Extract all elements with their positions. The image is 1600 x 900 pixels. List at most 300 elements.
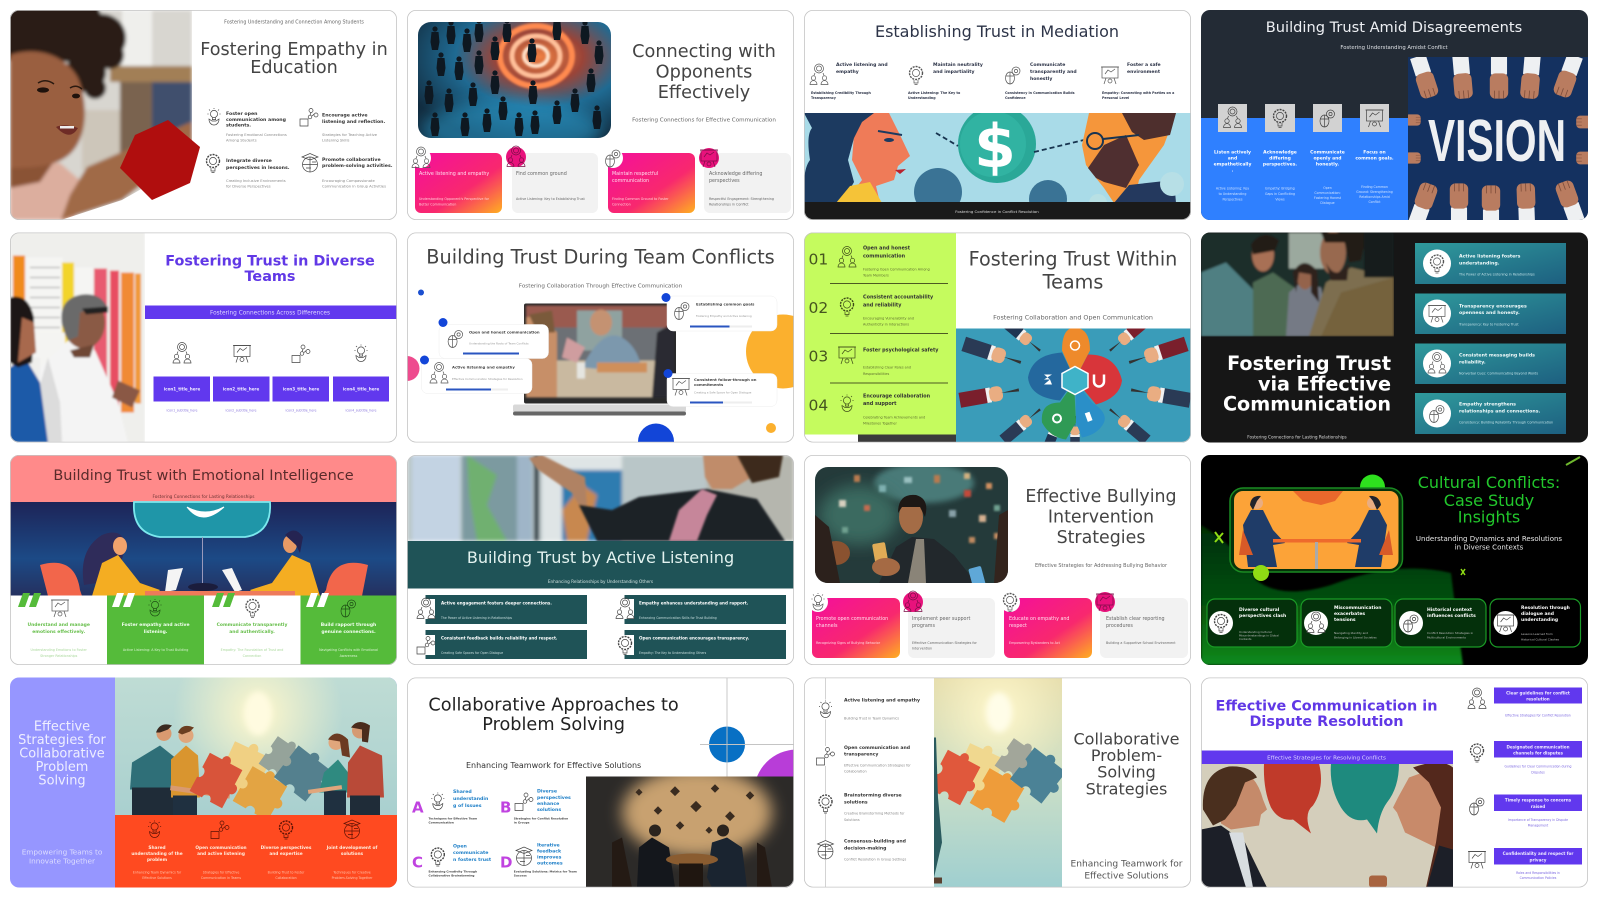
item B: solutions [537, 807, 561, 813]
card: promote open communication channels: channels [816, 623, 838, 629]
card: miscommunication: exacerbates [1334, 611, 1365, 617]
column: diverse perspectives: Diverse perspectives [261, 846, 311, 851]
item A: Shared [453, 790, 472, 795]
panel: Cultural Conflicts Case Study Insights [1201, 455, 1588, 665]
photo: man with phone among floating apps [815, 463, 1008, 590]
item: active listening and empathy: Active listening and empathy [844, 698, 920, 704]
item 04 [808, 394, 931, 426]
photo: crowd around glowing target [418, 22, 611, 138]
item: confidentiality: Communication Policies [1520, 876, 1557, 880]
card: consistent follow-through [664, 369, 777, 406]
item: open communication and transparency: Open communication and [844, 746, 910, 751]
subtitle: Innovate Together [29, 856, 95, 866]
laptop with meeting photo [513, 304, 686, 416]
column: diverse perspectives: Building Trust to Foster [268, 870, 304, 874]
card: educate on empathy and respect: Empowering Bystanders to Act [1009, 641, 1061, 645]
card: resolution through dialogue: understanding [1521, 617, 1558, 623]
card: establish clear reporting procedures: procedures [1106, 623, 1133, 629]
card: open and honest communication: Understanding the Roots of Team Conflicts [469, 342, 529, 346]
title: Fostering Empathy in [200, 40, 388, 60]
column: build rapport: Navigating Conflicts with Emotional [319, 648, 378, 652]
column: understand and manage emotions [10, 593, 107, 665]
card: diverse cultural perspectives: Diverse cultural [1239, 608, 1279, 613]
title: Education [250, 58, 338, 78]
column: acknowledge differing perspectives: Views [1275, 198, 1285, 202]
card: active listening and empathy [411, 147, 502, 213]
subtitle: Understanding Dynamics and Resolutions [1416, 535, 1562, 543]
blue panel [1201, 118, 1408, 220]
item D: improves [537, 854, 562, 860]
panel: Fostering Trust Within Teams [804, 232, 1192, 454]
item: communicate transparently: Confidence [1005, 96, 1026, 100]
subtitle: Effective Strategies for Addressing Bullying Behavior [1035, 563, 1168, 569]
subtitle: Fostering Connections for Lasting Relationships [152, 494, 255, 500]
item: communicate transparently: transparently and [1030, 69, 1077, 75]
item C [412, 844, 492, 878]
item: foster a safe environment: Personal Level [1102, 96, 1129, 100]
item: clear guidelines: Effective Strategies for Conflict Resolution [1505, 714, 1571, 718]
card: miscommunication [1301, 599, 1392, 647]
card: historical context: Conflict Resolution Strategies in [1427, 631, 1473, 635]
column: listen actively: . [1232, 168, 1234, 174]
column: communicate transparently: and authentically. [229, 629, 275, 635]
card: resolution through dialogue: Resolution through [1521, 606, 1570, 611]
bottom dark strip [858, 434, 956, 442]
subtitle: Effective Solutions [1084, 872, 1169, 882]
item: consistent messaging: Nonverbal Cues: Communicating Beyond Words [1459, 372, 1538, 376]
column: understand and manage emotions: Stronger Relationships [40, 654, 78, 658]
column: listen actively: to Understanding [1219, 192, 1246, 196]
item B: perspectives [537, 795, 571, 801]
item: clear guidelines [1468, 688, 1582, 718]
title: Effective Communication in [1216, 698, 1437, 714]
title: Effective Bullying [1025, 487, 1177, 507]
card: historical context: Multicultural Environments [1427, 636, 1466, 640]
card: implement peer support programs: Effective Communication Strategies for [912, 641, 977, 645]
item: brainstorming diverse solutions: Creative Brainstorming Methods for [844, 812, 905, 816]
item: promote collaborative activities [302, 154, 393, 188]
panel: Building Trust During Team Conflicts [394, 232, 820, 460]
column: icon3 [272, 345, 329, 412]
item 03: Establishing Clear Roles and [863, 366, 911, 370]
column: listen actively: Active Listening: Key [1216, 186, 1249, 190]
column: icon1: icon1_subtitle_here [167, 408, 198, 412]
column: acknowledge differing perspectives: perspectives. [1263, 162, 1297, 168]
column: diverse perspectives: Collaboration [275, 876, 297, 880]
item: brainstorming diverse solutions [816, 792, 905, 822]
column: open communication: and active listening [197, 851, 245, 857]
card: consistent follow-through: Creating a Safe Space for Open Dialogue [694, 390, 752, 394]
item: consistent feedback: Creating Safe Spaces for Open Dialogue [441, 651, 503, 655]
title: Building Trust with Emotional Intelligence [53, 468, 354, 484]
panel: Building Trust by Active Listening [407, 455, 794, 665]
banner: Fostering Connections Across Differences [210, 310, 330, 316]
item C: Collaborative Brainstorming [428, 874, 474, 878]
title: Collaborative [19, 746, 105, 762]
card: implement peer support programs: programs [912, 623, 935, 629]
item D: Success [514, 874, 527, 878]
item: timely response: Importance of Transparency in Dispute [1508, 818, 1568, 822]
item: transparency: openness and honesty. [1459, 310, 1520, 316]
illustration: people joining puzzle pieces [115, 628, 397, 823]
column: joint development [326, 820, 377, 880]
card: establishing common goals: Fostering Empathy and Active Listening [696, 314, 752, 318]
item B: Diverse [537, 790, 557, 794]
card: consistent follow-through: Consistent follow-through on [694, 377, 756, 382]
column: focus on common goals: Focus on [1363, 150, 1386, 156]
column: joint development: solutions [341, 851, 364, 857]
title: Intervention [1048, 508, 1154, 528]
item: consensus-building [816, 838, 906, 862]
item D [500, 842, 577, 878]
item: consensus-building: Conflict Resolution in Group Settings [844, 858, 906, 862]
card: active listening and empathy: Active listening and empathy [452, 364, 515, 370]
column: joint development: Techniques for Creative [333, 870, 371, 874]
subtitle: Fostering Collaboration Through Effective Communication [519, 284, 683, 290]
item: consensus-building: decision-making [844, 846, 886, 852]
item: integrate diverse perspectives: Integrate diverse [226, 159, 272, 164]
column: shared understanding: Enhancing Team Dynamics for [133, 870, 181, 874]
item: open communication and transparency: Collaboration [844, 770, 867, 774]
item: communicate transparently [1005, 62, 1077, 100]
item: maintain neutrality: Active Listening: The Key to [908, 91, 960, 95]
item: clear guidelines: Clear guidelines for conflict [1506, 690, 1570, 696]
column: build rapport: genuine connections. [321, 629, 376, 635]
salmon header [10, 455, 397, 502]
item 02 [808, 294, 934, 326]
item 03: Responsibilities [863, 372, 889, 376]
item: active listening: The Power of Active Listening in Relationships [1458, 272, 1535, 276]
title: Opponents [656, 62, 752, 82]
column: listen actively: Listen actively [1214, 150, 1251, 156]
banner: Effective Strategies for Resolving Conflicts [1267, 756, 1386, 762]
item D: Iterative [537, 844, 560, 848]
title: Building Trust During Team Conflicts [426, 246, 775, 268]
column: understand and manage emotions: Understanding Emotions to Foster [31, 648, 87, 652]
item: encourage active listening: Listening Skills [322, 138, 349, 142]
title: Problem [36, 760, 88, 775]
card: resolution through dialogue: dialogue and [1521, 611, 1554, 617]
card: open and honest communication [438, 318, 548, 358]
item C: communicate [453, 850, 488, 856]
card: maintain respectful communication: Finding Common Ground to Foster [612, 197, 669, 201]
item C: Open [453, 844, 467, 850]
item B: Strategies for Conflict Resolution [514, 816, 568, 820]
item: active listening: understanding. [1459, 260, 1500, 266]
item C: n fosters trust [453, 857, 492, 863]
card: historical context: Historical context [1427, 608, 1472, 613]
item: timely response: raised [1531, 804, 1545, 809]
column: icon2: icon2_subtitle_here [226, 408, 257, 412]
item: designated channels: Guidelines for Clear Communication during [1505, 764, 1571, 768]
panel: Fostering Trust via Effective Communication [1201, 230, 1588, 442]
column: foster empathy: Foster empathy and active [122, 623, 190, 628]
column: shared understanding: understanding of the [131, 851, 183, 857]
item: transparency: Transparency: Key to Fostering Trust [1458, 322, 1519, 326]
card: active listening and empathy: Effective Communication Strategies for Resolution [452, 377, 523, 381]
title: Effective [34, 720, 90, 734]
card: promote open communication channels: Recognizing Signs of Bullying Behavior [816, 641, 881, 645]
panel: Building Trust with Emotional Intelligence [10, 455, 397, 665]
panel: Effective Bullying Intervention Strategies [804, 455, 1191, 665]
item A: A [412, 798, 424, 816]
item: active listening: Active listening fosters [1459, 254, 1520, 260]
card: miscommunication: Miscommunication [1334, 606, 1381, 611]
item: brainstorming diverse solutions: Brainstorming diverse [844, 794, 902, 798]
card: active listening and empathy: Understanding Opponent's Perspective for [419, 197, 489, 201]
item B: in Groups [514, 820, 530, 824]
item: confidentiality: privacy [1530, 858, 1547, 862]
card: establish clear reporting procedures: Establish clear reporting [1106, 617, 1165, 622]
card: consistent follow-through: commitments [694, 382, 724, 387]
item: foster a safe environment: environment [1127, 69, 1161, 75]
card: implement peer support programs: Implement peer support [912, 617, 970, 622]
item 04: Milestones Together [863, 422, 898, 426]
card: find common ground: Find common ground [516, 171, 567, 177]
card: maintain respectful communication: Maintain respectful [612, 172, 658, 177]
card: diverse cultural perspectives: Contexts [1239, 637, 1252, 641]
column: build rapport: Build rapport through [321, 623, 376, 628]
illustration: negotiators at table [1230, 474, 1402, 581]
item 04: Celebrating Team Achievements and [863, 416, 925, 420]
item 03 [808, 347, 939, 376]
photo: child in classroom [0, 0, 192, 220]
subtitle: Fostering Understanding and Connection Among Students [224, 20, 364, 26]
column: communicate openly: Fostering Honest [1314, 196, 1342, 200]
column: icon3: icon3_subtitle_here [286, 408, 317, 412]
panel: Establishing Trust in Mediation [804, 10, 1191, 220]
column: focus on common goals: Conflict [1368, 200, 1381, 204]
item: promote collaborative activities: problem-solving activities. [322, 163, 393, 169]
card: establish clear reporting procedures: Building a Supportive School Environment [1106, 641, 1176, 645]
column: acknowledge differing perspectives: differing [1269, 156, 1291, 162]
sparkle marks [1215, 457, 1580, 575]
title: Building Trust Amid Disagreements [1266, 19, 1522, 36]
photo: team at table under floating pieces [586, 768, 794, 888]
column: open communication: Strategies for Effective [203, 870, 239, 874]
banner [1201, 750, 1453, 764]
card: diverse cultural perspectives: Understanding Cultural [1239, 630, 1272, 634]
column: focus on common goals: Relationships Amid [1359, 195, 1390, 199]
column: communicate openly: Open [1323, 186, 1332, 190]
illustration: two people and coin: $ [974, 112, 1016, 182]
card: establishing common goals [662, 293, 777, 331]
item: foster open communication: Foster open [226, 112, 257, 117]
item: promote collaborative activities: Encouraging Compassionate [322, 179, 375, 183]
item: communicate transparently: honestly [1030, 76, 1052, 82]
title: Effectively [658, 83, 750, 103]
column: acknowledge differing perspectives: Gaps in Conflicting [1265, 192, 1295, 196]
item 01: Open and honest [863, 246, 910, 252]
item A: Communication [428, 820, 454, 824]
column: joint development: Problem-Solving Together [332, 876, 373, 880]
column: diverse perspectives [261, 821, 312, 880]
item: confidentiality: Roles and Responsibilities in [1516, 871, 1560, 875]
panel: Collaborative Problem-Solving Strategies [804, 642, 1191, 888]
item: consistent feedback [416, 630, 587, 659]
item D: feedback [537, 848, 562, 854]
item: open communication: Empathy: The Key to Understanding Others [639, 651, 707, 655]
illustration: hands assembling petals [956, 315, 1192, 454]
subtitle: Empowering Teams to [22, 848, 102, 856]
item: encourage active listening [300, 108, 386, 142]
card: acknowledge differing perspectives [699, 148, 791, 213]
item: encourage active listening: listening and reflection. [322, 119, 386, 125]
item: maintain neutrality [908, 62, 983, 100]
column: listen actively: Perspectives [1222, 198, 1243, 202]
card: acknowledge differing perspectives: Acknowledge differing [709, 172, 762, 177]
item 02: Authenticity in Interactions [863, 322, 909, 326]
item: active listening and empathy: Building Trust in Team Dynamics [844, 716, 899, 720]
title: Dispute Resolution [1249, 714, 1404, 730]
item: designated channels: channels for disputes [1513, 750, 1563, 756]
column: shared understanding: Shared [148, 846, 166, 851]
item 01: Team Members [862, 274, 889, 278]
item: empathy enhances [615, 595, 786, 624]
item: foster open communication: communication among [226, 117, 286, 123]
item: foster open communication: Fostering Emotional Connections [226, 133, 287, 137]
item: open communication and transparency: transparency [844, 752, 878, 758]
card: miscommunication: Navigating Identity and [1334, 631, 1368, 635]
item: communicate transparently: Consistency in Communication Builds [1005, 91, 1075, 95]
card: implement peer support programs [903, 591, 995, 658]
item B [500, 788, 571, 824]
item 01 [808, 246, 930, 278]
item: consistent feedback: Consistent feedback builds reliability and respect. [441, 636, 558, 640]
card: acknowledge differing perspectives: Relationships in Conflict [709, 202, 749, 206]
footer subtitle: Fostering Connections for Lasting Relationships [1247, 434, 1347, 440]
illustration: two people and coin [804, 113, 1190, 202]
illustration: two people under glowing cloud [10, 502, 397, 596]
item: active listening and empathy: Active listening and [836, 63, 888, 68]
column: icon1 [154, 342, 210, 412]
title: Cultural Conflicts: [1418, 473, 1560, 492]
card: historical context: influences conflicts [1427, 613, 1476, 619]
card: historical context [1395, 599, 1486, 647]
item: maintain neutrality: and impartiality [933, 69, 974, 75]
column: communicate transparently: Connection [243, 654, 261, 658]
item: active listening [1415, 243, 1566, 284]
item: consistent messaging [1415, 344, 1566, 384]
item: clear guidelines: resolution [1526, 696, 1550, 702]
title: Teams [245, 269, 295, 285]
panel: Fostering Empathy in Education [0, 0, 397, 220]
column: communicate openly: Communication: [1314, 191, 1341, 195]
item: maintain neutrality: Maintain neutrality [933, 63, 983, 68]
item: foster a safe environment: Foster a safe [1127, 63, 1161, 68]
item: consistent messaging: reliability. [1459, 360, 1486, 366]
column: open communication: Communication in Teams [201, 876, 241, 880]
item: maintain neutrality: Understanding [908, 96, 936, 100]
footer bar: Fostering Confidence in Conflict Resolution [955, 209, 1039, 214]
column: joint development: Joint development of [327, 846, 377, 851]
column: communicate transparently: Communicate transparently [217, 623, 287, 628]
column: foster empathy: Active Listening: A Key to Trust Building [123, 648, 188, 652]
item: transparency: Transparency encourages [1459, 304, 1527, 310]
column: listen actively: empathetically [1214, 162, 1251, 168]
item 03: Foster psychological safety [863, 348, 939, 354]
column: diverse perspectives: and expertise [269, 851, 303, 857]
card: open and honest communication: Open and honest communication [469, 330, 540, 334]
column: listen actively [1214, 104, 1251, 202]
column: icon2: icon2_title_here [223, 386, 259, 392]
title: Strategies [1057, 528, 1145, 548]
column: icon3: icon3_title_here [283, 386, 319, 392]
card: maintain respectful communication: Connection [612, 202, 631, 206]
card: resolution through dialogue: Lessons Learned from [1521, 632, 1553, 636]
column: icon4: icon4_subtitle_here [346, 408, 377, 412]
column: acknowledge differing perspectives [1263, 104, 1297, 202]
card: active listening and empathy: Better Communication [419, 202, 456, 206]
column: focus on common goals: Ground: Strengthening [1356, 190, 1393, 194]
title: Solving [1097, 762, 1156, 782]
illustration: puzzle pieces [928, 642, 1073, 888]
card: diverse cultural perspectives [1207, 599, 1297, 647]
item: foster open communication: students. [226, 122, 251, 128]
title: Problem- [1091, 746, 1162, 765]
item: empathy [1415, 393, 1566, 434]
title: Fostering Trust in Diverse [165, 254, 375, 270]
column: communicate transparently: Empathy: The Foundation of Trust and [221, 648, 283, 652]
subtitle: Enhancing Teamwork for Effective Solutions [466, 761, 641, 770]
subtitle: Enhancing Teamwork for [1070, 860, 1182, 870]
item: empathy enhances: Empathy enhances understanding and rapport. [639, 600, 749, 606]
column: build rapport [300, 593, 397, 665]
item: confidentiality [1468, 848, 1582, 880]
item 02: and reliability [863, 302, 902, 308]
title: Solving [38, 774, 86, 788]
item: active engagement [416, 595, 587, 624]
panel: Fostering Trust in Diverse Teams [10, 232, 397, 442]
card: active listening and empathy: Active listening and empathy [419, 171, 489, 177]
item: timely response: Management [1528, 824, 1549, 828]
item 02: 02 [808, 299, 828, 317]
photo: VISION with fists [1408, 57, 1588, 220]
item: active engagement: The Power of Active Listening in Relationships [440, 616, 512, 620]
photo: two faces with speech bubbles [1201, 762, 1453, 888]
item 04: 04 [808, 396, 828, 414]
item: foster open communication: Among Students [226, 138, 257, 142]
title: Collaborative Approaches to [428, 696, 679, 716]
item: active listening and empathy: Transparency [811, 96, 837, 100]
photo: presenter pointing at screens [407, 455, 794, 541]
column: focus on common goals: common goals. [1355, 156, 1394, 162]
title: Teams [1042, 270, 1103, 294]
item: consistent messaging: Consistent messaging builds [1459, 354, 1535, 358]
decorative circles and lines [700, 678, 840, 836]
column: open communication [195, 821, 247, 880]
column: build rapport: Awareness [340, 654, 358, 658]
card: acknowledge differing perspectives: perspectives [709, 178, 740, 184]
column: focus on common goals [1355, 104, 1394, 204]
card: promote open communication channels [808, 592, 900, 658]
column: acknowledge differing perspectives: Empathy: Bridging [1265, 186, 1295, 190]
item 01: 01 [808, 250, 828, 268]
item: timely response [1470, 794, 1582, 828]
title band: Building Trust by Active Listening [467, 548, 734, 567]
column: shared understanding [131, 820, 183, 880]
card: establish clear reporting procedures [1095, 592, 1188, 658]
card: resolution through dialogue [1490, 599, 1580, 647]
title: Strategies [1086, 780, 1167, 798]
item: integrate diverse perspectives: perspectives in lessons. [226, 165, 290, 171]
column: foster empathy: listening. [144, 629, 168, 635]
card: establishing common goals: Establishing common goals [696, 302, 755, 306]
item: open communication: Open communication encourages transparency. [639, 636, 750, 640]
column: communicate openly [1310, 104, 1345, 205]
item: integrate diverse perspectives: for Diverse Perspectives [226, 184, 271, 188]
column: shared understanding: problem [147, 857, 168, 863]
